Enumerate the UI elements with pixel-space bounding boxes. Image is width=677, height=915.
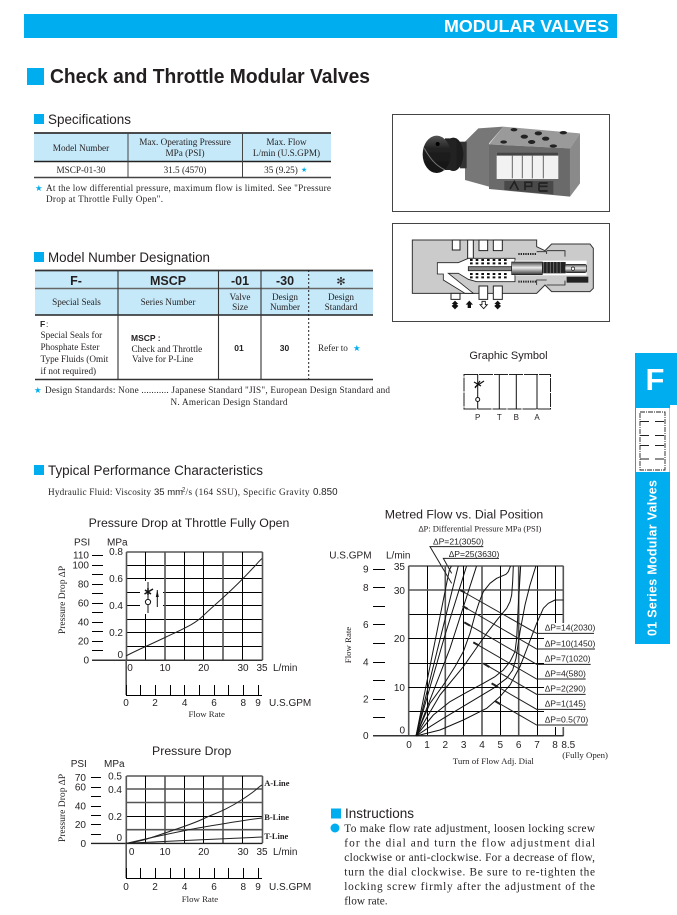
model number table: : bbox=[46, 319, 48, 329]
page title: Check and Throttle Modular Valves bbox=[50, 66, 370, 88]
chart: pressure drop at throttle fully open: 0 bbox=[127, 663, 133, 674]
chart: pressure drop: 4 bbox=[182, 882, 188, 893]
specifications note bbox=[35, 183, 331, 204]
chart: pressure drop at throttle fully open: 20 bbox=[198, 663, 210, 674]
chart: pressure drop at throttle fully open: 2 bbox=[152, 698, 158, 709]
chart: pressure drop at throttle fully open: 4 bbox=[182, 698, 188, 709]
model number table: MSCP : bbox=[131, 333, 161, 343]
specifications table bbox=[34, 133, 331, 178]
design standards note: ★ bbox=[34, 385, 42, 395]
chart: pressure drop: 35 bbox=[256, 847, 268, 858]
specifications note: ★ bbox=[35, 183, 43, 193]
specifications table: MPa (PSI) bbox=[165, 148, 205, 158]
model number table: Series Number bbox=[141, 297, 195, 307]
hydraulic fluid note: Hydraulic Fluid: Viscosity bbox=[48, 487, 151, 497]
chart: metred flow vs dial position: 9 bbox=[363, 564, 369, 576]
chart: metred flow vs dial position: U.S.GPM bbox=[329, 550, 372, 562]
chart: metred flow vs dial position: 8 bbox=[363, 583, 369, 594]
chart: metred flow vs dial position: 20 bbox=[394, 634, 405, 645]
instructions text: clockwise or anti-clockwise. For a decrease of flow, bbox=[344, 852, 595, 864]
chart: metred flow vs dial position: 7 bbox=[534, 740, 540, 751]
chart: metred flow vs dial position: 2 bbox=[443, 740, 449, 751]
chart: metred flow vs dial position: 0 bbox=[406, 740, 412, 751]
chart: pressure drop: 0.5 bbox=[108, 772, 122, 782]
model number table: 01 bbox=[234, 343, 244, 353]
hydraulic fluid note bbox=[48, 487, 338, 498]
instructions text: To make flow rate adjustment, loosen locking screw bbox=[344, 823, 596, 835]
chart: pressure drop at throttle fully open: 20 bbox=[78, 636, 89, 648]
chart: pressure drop: Pressure Drop bbox=[152, 744, 231, 758]
delta P labels: ∆P=2(290) bbox=[545, 684, 586, 694]
graphic symbol: T bbox=[497, 413, 502, 422]
model number table: Design bbox=[272, 292, 298, 302]
delta P labels: ∆P=7(1020) bbox=[545, 654, 591, 664]
chart: metred flow vs dial position: 8 bbox=[552, 740, 558, 751]
chart: pressure drop at throttle fully open: 0.2 bbox=[109, 628, 123, 639]
specifications note: At the low differential pressure, maximum flow is limited. See "Pressure bbox=[46, 183, 331, 193]
chart: pressure drop: 0 bbox=[116, 833, 122, 844]
chart: metred flow vs dial position: 35 bbox=[394, 562, 405, 573]
chart: pressure drop at throttle fully open: MPa bbox=[107, 538, 128, 548]
instructions text bbox=[330, 823, 596, 908]
product photo panel bbox=[392, 114, 610, 212]
chart: metred flow vs dial position: 4 bbox=[479, 740, 485, 751]
model number table: -01 bbox=[231, 274, 249, 288]
chart: metred flow vs dial position: (Fully Open) bbox=[562, 750, 608, 760]
model number table: Refer to bbox=[318, 343, 348, 353]
hydraulic fluid note: 0.850 bbox=[313, 487, 338, 498]
model number table bbox=[35, 270, 373, 380]
chart: pressure drop at throttle fully open: 30 bbox=[237, 663, 249, 674]
chart: metred flow vs dial position: 30 bbox=[394, 586, 405, 597]
model number table: 30 bbox=[280, 343, 289, 353]
chart: pressure drop: 60 bbox=[75, 782, 86, 794]
chart: pressure drop at throttle fully open: Flow Rate bbox=[188, 709, 225, 719]
chart: pressure drop: 30 bbox=[237, 847, 249, 858]
chart: pressure drop: 0.4 bbox=[108, 785, 122, 796]
side tab: 01 Series Modular Valves bbox=[646, 480, 660, 636]
chart: pressure drop at throttle fully open: 0.4 bbox=[109, 601, 123, 612]
chart: metred flow vs dial position: 1 bbox=[424, 740, 430, 751]
specifications table: L/min (U.S.GPM) bbox=[253, 148, 320, 158]
delta P labels: ∆P=21(3050) bbox=[433, 536, 484, 546]
chart: pressure drop at throttle fully open: 8 bbox=[241, 698, 247, 709]
model number table: Size bbox=[232, 302, 248, 312]
specifications table: MSCP-01-30 bbox=[56, 165, 106, 175]
design standards note: N. American Design Standard bbox=[170, 397, 288, 407]
specifications table: 31.5 (4570) bbox=[164, 165, 206, 175]
model number table: F- bbox=[70, 274, 82, 288]
chart: pressure drop at throttle fully open: 0 bbox=[123, 698, 129, 709]
model number table: Number bbox=[270, 302, 300, 312]
icon: valve cross-section bbox=[412, 240, 593, 309]
curves: A, B and T lines bbox=[126, 785, 262, 843]
instructions text: for the dial and turn the flow adjustment dial bbox=[344, 838, 595, 850]
model number table: ★ bbox=[353, 343, 361, 353]
chart: metred flow vs dial position: ∆P: Differential Pressure MPa (PSI) bbox=[419, 524, 542, 534]
chart: metred flow vs dial position: 10 bbox=[394, 683, 405, 694]
specifications table: 35 (9.25) bbox=[264, 165, 298, 175]
chart: metred flow vs dial position: 8.5 bbox=[561, 740, 576, 751]
specifications table: Model Number bbox=[53, 143, 109, 153]
icon: check throttle symbol bbox=[140, 581, 163, 614]
cross-section panel bbox=[392, 224, 610, 322]
model number table: Special Seals bbox=[52, 297, 101, 307]
chart: pressure drop at throttle fully open: L/min bbox=[273, 663, 297, 674]
chart: pressure drop at throttle fully open: 0.8 bbox=[109, 547, 123, 558]
chart: pressure drop: 2 bbox=[152, 882, 158, 893]
model number table: Type Fluids (Omit bbox=[40, 354, 109, 364]
chart: pressure drop: PSI bbox=[71, 759, 87, 770]
model number table: Design bbox=[328, 292, 354, 302]
specifications table: Max. Operating Pressure bbox=[139, 137, 231, 147]
chart: pressure drop at throttle fully open: 100 bbox=[72, 560, 89, 572]
delta P labels bbox=[433, 536, 596, 724]
instructions text: turn the dial clockwise. Be sure to re-tighten the bbox=[344, 866, 595, 878]
chart: pressure drop: 70 bbox=[75, 773, 86, 784]
chart curve bbox=[126, 558, 262, 656]
chart: pressure drop: MPa bbox=[104, 759, 125, 770]
chart: metred flow vs dial position: 5 bbox=[498, 740, 504, 751]
chart: pressure drop at throttle fully open: 110 bbox=[73, 550, 89, 562]
chart: pressure drop at throttle fully open: 0.6 bbox=[109, 574, 123, 585]
model number table: Check and Throttle bbox=[132, 344, 202, 354]
model number table: ✻ bbox=[336, 276, 346, 288]
chart: metred flow vs dial position: Turn of Flow Adj. Dial bbox=[453, 756, 534, 766]
chart: pressure drop: 0 bbox=[80, 839, 86, 850]
chart: pressure drop: 40 bbox=[75, 802, 86, 812]
chart: pressure drop at throttle fully open: 6 bbox=[211, 698, 217, 709]
leader lines bbox=[430, 547, 595, 725]
chart: pressure drop at throttle fully open: 10 bbox=[159, 663, 171, 674]
specifications note: Drop at Throttle Fully Open". bbox=[46, 194, 163, 204]
chart: metred flow vs dial position: Flow Rate bbox=[343, 627, 353, 663]
chart: pressure drop: 9 bbox=[255, 882, 261, 893]
chart: pressure drop: L/min bbox=[273, 847, 297, 858]
chart: pressure drop at throttle fully open: 80 bbox=[78, 580, 89, 590]
chart: pressure drop: Flow Rate bbox=[182, 894, 218, 904]
design standards note: Design Standards: None ........... Japanese Standard "JIS", European Design Standard and bbox=[45, 385, 390, 395]
icon: port flow arrows bbox=[452, 301, 501, 309]
flow curves bbox=[416, 566, 563, 736]
chart: metred flow vs dial position: 0 bbox=[363, 731, 369, 742]
chart: pressure drop at throttle fully open bbox=[57, 516, 311, 719]
heading: specifications: Specifications bbox=[48, 112, 131, 127]
chart: metred flow vs dial position: 6 bbox=[363, 620, 369, 631]
delta P labels: ∆P=14(2030) bbox=[545, 623, 596, 633]
chart: pressure drop bbox=[57, 744, 311, 904]
chart: pressure drop: 10 bbox=[159, 847, 171, 858]
header band: MODULAR VALVES bbox=[444, 16, 609, 36]
chart: pressure drop: 0 bbox=[129, 847, 135, 858]
chart: pressure drop: T-Line bbox=[264, 832, 288, 841]
design standards note bbox=[34, 385, 390, 407]
hydraulic fluid note: /s (164 SSU), Specific Gravity bbox=[186, 487, 310, 497]
chart: pressure drop at throttle fully open: U.S.GPM bbox=[269, 698, 311, 709]
chart: metred flow vs dial position: 4 bbox=[363, 658, 369, 668]
chart: pressure drop at throttle fully open: PSI bbox=[74, 538, 90, 548]
label background bbox=[544, 623, 598, 727]
heading: model number designation: Model Number Designation bbox=[48, 250, 210, 265]
icon: valve photo bbox=[423, 127, 580, 197]
chart: pressure drop at throttle fully open: 60 bbox=[78, 598, 89, 610]
chart: pressure drop: Pressure Drop ∆P bbox=[57, 774, 68, 842]
delta P labels: ∆P=1(145) bbox=[545, 699, 586, 709]
hydraulic fluid note: 35 mm bbox=[154, 487, 183, 498]
heading: typical performance characteristics: Typical Performance Characteristics bbox=[48, 463, 263, 478]
instructions text: flow rate. bbox=[344, 896, 388, 908]
chart: pressure drop at throttle fully open: Pressure Drop at Throttle Fully Open bbox=[89, 516, 290, 530]
chart: pressure drop at throttle fully open: 9 bbox=[255, 698, 261, 709]
chart: pressure drop: 8 bbox=[241, 882, 247, 893]
chart: pressure drop: 20 bbox=[198, 847, 210, 858]
delta P labels: ∆P=10(1450) bbox=[545, 639, 596, 649]
chart: pressure drop: A-Line bbox=[264, 779, 290, 788]
model number table: -30 bbox=[276, 274, 294, 288]
model number table: Valve for P-Line bbox=[132, 354, 193, 364]
graphic symbol: P bbox=[475, 413, 480, 422]
model number table: Valve bbox=[230, 292, 250, 302]
instructions text: locking screw firmly after the adjustment of the bbox=[344, 881, 595, 893]
graphic symbol: B bbox=[514, 413, 519, 422]
specifications table: ★ bbox=[301, 166, 307, 174]
model number table: Phosphate Ester bbox=[40, 342, 99, 352]
delta P labels: ∆P=25(3630) bbox=[449, 549, 500, 559]
chart: pressure drop: 6 bbox=[211, 882, 217, 893]
side tab: F bbox=[646, 362, 664, 397]
model number table: Special Seals for bbox=[40, 330, 102, 340]
model number table: F bbox=[40, 319, 45, 329]
chart: metred flow vs dial position: L/min bbox=[386, 550, 410, 562]
graphic symbol: A bbox=[534, 413, 540, 422]
delta P labels: ∆P=4(580) bbox=[545, 669, 586, 679]
delta P labels: ∆P=0.5(70) bbox=[545, 714, 588, 724]
specifications table: Max. Flow bbox=[266, 137, 307, 147]
chart: pressure drop: 20 bbox=[75, 820, 86, 831]
hydraulic fluid note: 2 bbox=[182, 488, 186, 494]
chart: pressure drop at throttle fully open: Pressure Drop ∆P bbox=[57, 566, 68, 634]
chart: metred flow vs dial position: 3 bbox=[461, 740, 467, 751]
graphic symbol: Graphic Symbol bbox=[469, 350, 548, 362]
model number table: if not required) bbox=[40, 366, 96, 376]
chart: pressure drop: B-Line bbox=[264, 813, 289, 822]
chart: pressure drop: U.S.GPM bbox=[269, 882, 311, 893]
chart: metred flow vs dial position: Metred Flow vs. Dial Position bbox=[385, 508, 543, 522]
model number table: MSCP bbox=[150, 274, 186, 288]
model number table: Standard bbox=[325, 302, 358, 312]
chart: pressure drop: 0.2 bbox=[108, 812, 122, 823]
chart: metred flow vs dial position: 2 bbox=[363, 694, 369, 706]
chart: pressure drop: 0 bbox=[123, 882, 129, 893]
graphic symbol bbox=[464, 350, 550, 422]
chart: metred flow vs dial position: 0 bbox=[399, 726, 405, 736]
heading: instructions: Instructions bbox=[345, 806, 414, 821]
chart: pressure drop at throttle fully open: 35 bbox=[256, 663, 268, 674]
chart: pressure drop at throttle fully open: 0 bbox=[83, 656, 89, 666]
side tab bbox=[635, 353, 677, 644]
chart: pressure drop at throttle fully open: 0 bbox=[117, 650, 123, 661]
chart: pressure drop at throttle fully open: 40 bbox=[78, 618, 89, 628]
header band bbox=[24, 14, 617, 38]
chart: metred flow vs dial position bbox=[329, 508, 608, 766]
chart: metred flow vs dial position: 6 bbox=[516, 740, 522, 751]
